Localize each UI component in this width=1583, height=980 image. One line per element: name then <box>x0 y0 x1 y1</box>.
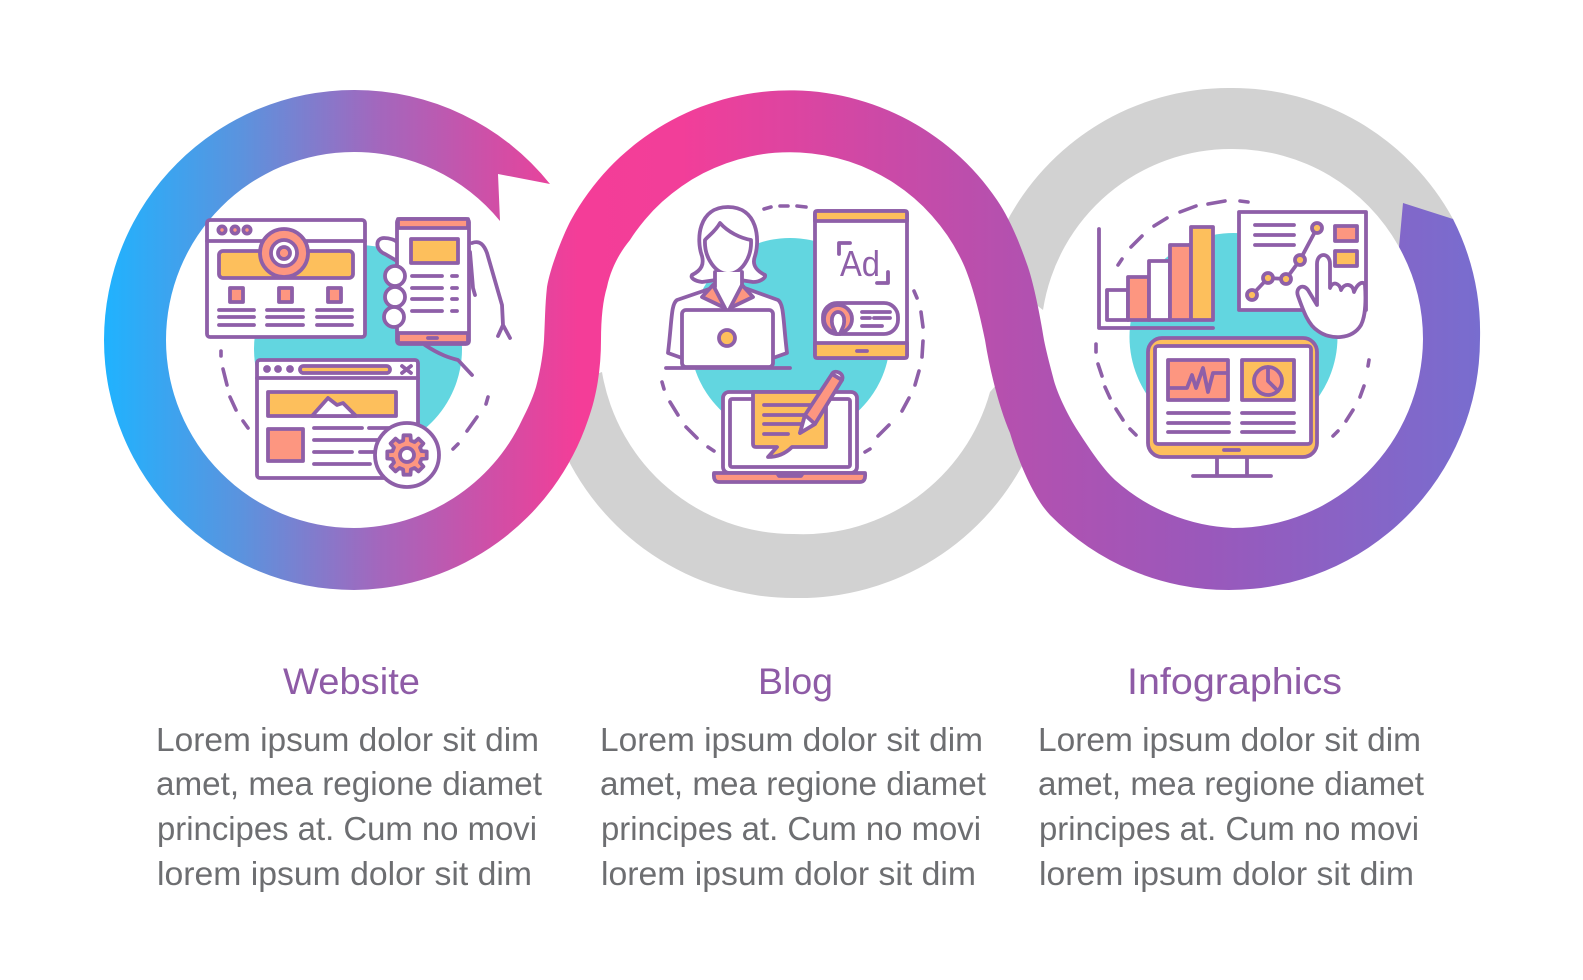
gear <box>387 435 427 475</box>
dashed arc <box>1096 201 1369 436</box>
website body: principes at. Cum no movi <box>157 810 537 847</box>
website body: Lorem ipsum dolor sit dim <box>156 721 539 758</box>
infographics heading: Infographics <box>1127 661 1342 702</box>
dashed arc <box>221 351 488 449</box>
gray ring: right, upper part <box>1005 88 1453 310</box>
blog body: Lorem ipsum dolor sit dim <box>600 721 983 758</box>
infographics body <box>1038 721 1424 892</box>
website body: amet, mea regione diamet <box>156 765 542 802</box>
blog heading: Blog <box>758 661 833 702</box>
website heading: Website <box>283 661 420 702</box>
teal blob <box>1130 233 1338 441</box>
phone in hand <box>377 219 510 375</box>
chart card with hand <box>1239 212 1366 337</box>
infographics body: lorem ipsum dolor sit dim <box>1039 855 1414 892</box>
icon group: blog <box>662 206 923 482</box>
icon group: infographics <box>1096 201 1369 476</box>
dashed arc <box>662 206 923 452</box>
woman at laptop <box>666 207 790 368</box>
teal blob <box>254 245 462 453</box>
blog body: principes at. Cum no movi <box>601 810 981 847</box>
website body: lorem ipsum dolor sit dim <box>157 855 532 892</box>
monitor dashboard <box>1148 338 1317 476</box>
tablet with ad <box>815 211 907 358</box>
blog body <box>600 721 986 892</box>
infographics body: Lorem ipsum dolor sit dim <box>1038 721 1421 758</box>
infographics body: amet, mea regione diamet <box>1038 765 1424 802</box>
icon group: website <box>207 219 510 487</box>
browser window 2 with gear <box>257 360 439 487</box>
gradient ribbon with arrow ends <box>104 90 1480 590</box>
website body <box>156 721 542 892</box>
blog body: lorem ipsum dolor sit dim <box>601 855 976 892</box>
ad label: Ad <box>840 243 880 284</box>
infographics body: principes at. Cum no movi <box>1039 810 1419 847</box>
bar chart <box>1099 227 1213 328</box>
laptop with speech bubble and pencil <box>714 372 865 482</box>
blog body: amet, mea regione diamet <box>600 765 986 802</box>
browser window 1 <box>207 220 365 337</box>
gray ring: middle, lower part <box>559 372 1030 598</box>
teal blob <box>690 238 890 438</box>
